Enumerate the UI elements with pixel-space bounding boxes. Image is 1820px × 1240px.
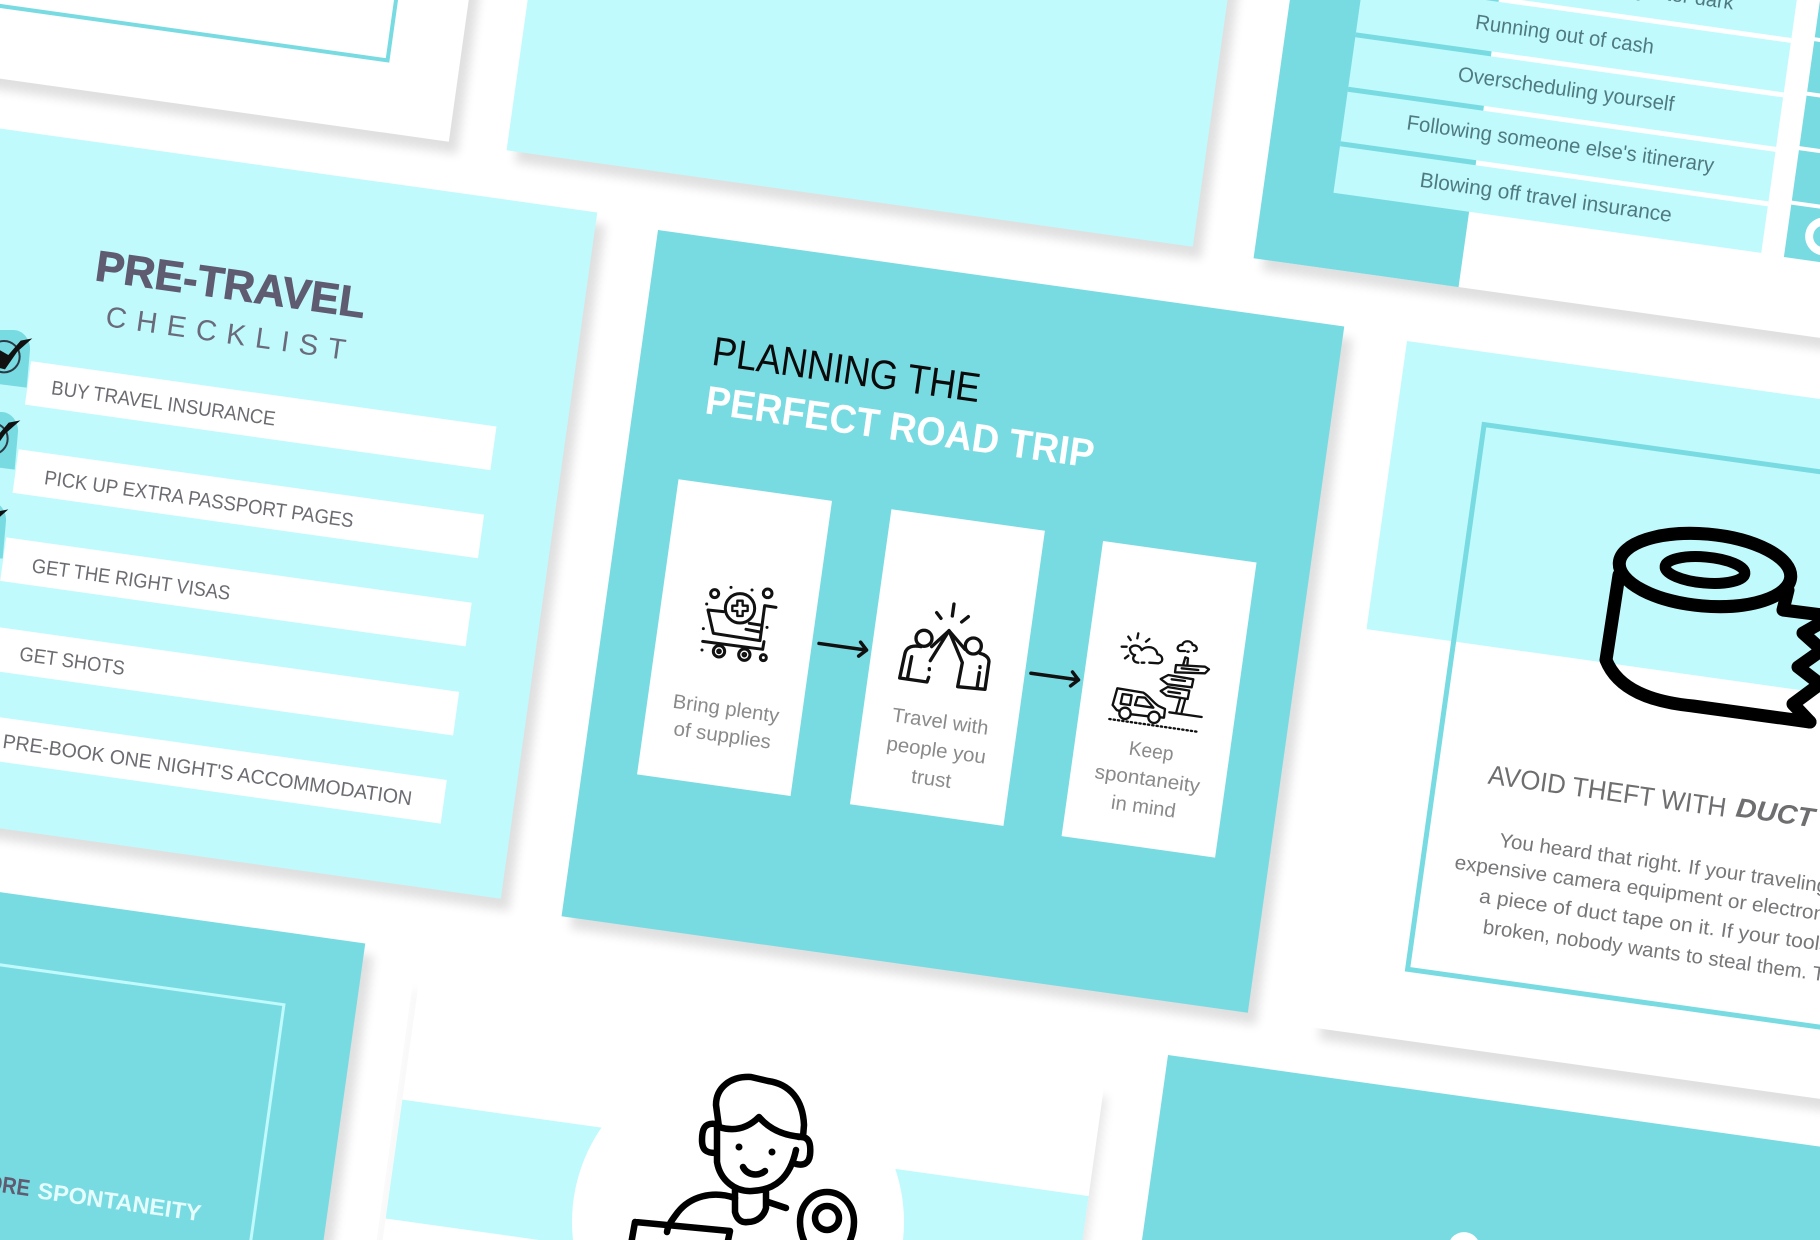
heading: pre-travel checklist: PRE-TRAVEL [93, 242, 369, 328]
checklist labels: GET THE RIGHT VISAS [30, 555, 232, 605]
panel: bottom-center page with traveller [321, 959, 1113, 1240]
panel: avoid theft with duct tape [1309, 341, 1820, 1136]
panel: top-right common mistakes list: Following someone else's itinerary [1405, 111, 1716, 177]
text: keep spontaneity in mind [1089, 733, 1205, 825]
text: more spontaneity [0, 1167, 203, 1226]
panel: planning the perfect road trip [560, 230, 1354, 1025]
text: duct tape explanation: a piece of duct tape on it. If your tools [1478, 886, 1820, 957]
icon: medical supply cart [702, 587, 776, 661]
checklist bars [0, 361, 496, 824]
text: bring plenty of supplies [668, 691, 780, 754]
panel: bottom-right teal page [1072, 1055, 1820, 1240]
icon: car and signpost [1109, 633, 1209, 732]
panel: top-right common mistakes list: Running out of cash [1474, 11, 1655, 59]
text: travel with people you trust: Travel with [891, 704, 990, 740]
heading: planning the perfect road trip [703, 328, 1104, 477]
icons: check marks [0, 324, 40, 564]
icon: roll of duct tape [1606, 527, 1820, 722]
panel: pre-travel checklist [0, 116, 607, 911]
panel: top-right common mistakes list: Overscheduling yourself [1457, 63, 1676, 116]
checklist labels: PICK UP EXTRA PASSPORT PAGES [43, 467, 355, 532]
text: travel with people you trust [881, 704, 991, 797]
heading: pre-travel checklist [87, 242, 369, 368]
text: bring plenty of supplies: of supplies [672, 718, 772, 754]
heading: avoid theft with duct tape [1486, 758, 1820, 847]
heading: planning the perfect road trip: PLANNING THE [710, 328, 983, 411]
heading: pre-travel checklist: CHECKLIST [104, 301, 348, 367]
text: travel with people you trust: people you [885, 733, 987, 769]
checklist labels: GET SHOTS [18, 643, 126, 680]
checklist labels: PRE-BOOK ONE NIGHT'S ACCOMMODATION [1, 731, 413, 810]
circle behind traveller [572, 1056, 904, 1240]
text: keep spontaneity in mind: spontaneity [1093, 761, 1201, 798]
heading: planning the perfect road trip: PERFECT ROAD TRIP [703, 379, 1097, 477]
text: duct tape explanation: broken, nobody wants to steal them. T [1482, 916, 1820, 986]
arrow: step two to three [1030, 666, 1079, 687]
card: keep spontaneity in mind [1062, 541, 1257, 858]
panel: top-left white page with frame [0, 0, 555, 154]
text: duct tape explanation: You heard that right. If your traveling [1498, 830, 1820, 898]
checklist labels [0, 377, 463, 810]
panel: top-center pale page [505, 0, 1299, 259]
panel: more spontaneity [0, 847, 375, 1240]
icon: high five [900, 604, 989, 689]
text: travel with people you trust: trust [910, 766, 953, 793]
arrow: step one to two [818, 637, 868, 657]
card: bring plenty of supplies [637, 479, 832, 796]
text: keep spontaneity in mind: in mind [1110, 792, 1177, 823]
checklist labels: BUY TRAVEL INSURANCE [50, 377, 277, 431]
panel: top-right common mistakes list [1252, 0, 1820, 367]
text: more spontaneity: SPONTANEITY [36, 1177, 203, 1226]
heading: avoid theft with duct tape: AVOID THEFT WITH [1486, 760, 1728, 823]
text: bring plenty of supplies: Bring plenty [671, 691, 780, 727]
text: duct tape explanation [1445, 824, 1820, 989]
icon: traveller with laptop and map pin [630, 1077, 854, 1240]
panel: top-right common mistakes list: Blowing off travel insurance [1418, 169, 1673, 227]
card: travel with people you trust [850, 509, 1045, 826]
text: keep spontaneity in mind: Keep [1127, 738, 1175, 766]
